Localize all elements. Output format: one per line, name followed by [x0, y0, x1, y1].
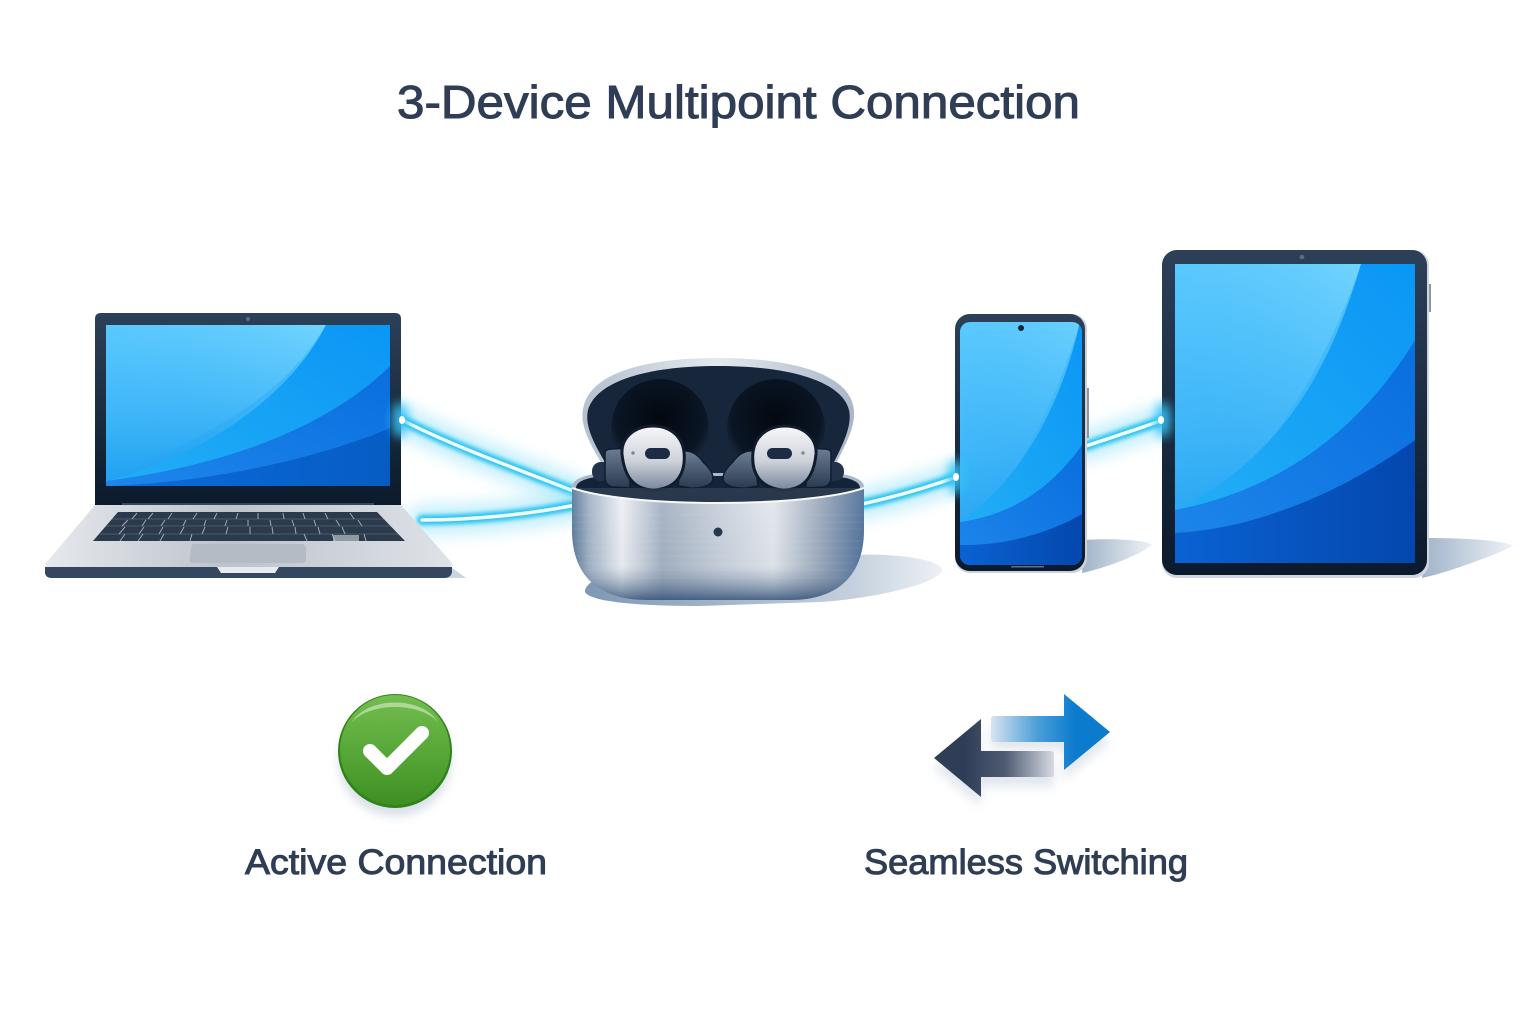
laptop — [45, 313, 466, 578]
laptop shadow — [440, 565, 466, 578]
laptop hinge — [122, 503, 374, 506]
charging case with earbuds — [572, 358, 942, 606]
laptop lid — [95, 313, 401, 505]
device glow points — [392, 402, 1171, 495]
case body — [572, 488, 864, 600]
phone screen — [960, 322, 1082, 565]
tablet camera — [1300, 255, 1304, 259]
phone bezel — [955, 314, 1085, 571]
laptop keyboard — [93, 512, 405, 541]
case lid — [582, 358, 854, 480]
right earbud — [723, 426, 844, 490]
icon: switching arrows — [934, 694, 1110, 807]
case shadow — [585, 555, 942, 606]
title: 3-Device Multipoint Connection — [397, 76, 1080, 128]
right arrow — [991, 694, 1110, 770]
case indicator light — [714, 528, 722, 536]
icon: green check — [338, 694, 452, 816]
case rim — [572, 473, 864, 510]
label: active connection: Active Connection — [245, 843, 547, 882]
case interior — [576, 476, 860, 503]
label: seamless switching: Seamless Switching — [864, 843, 1188, 882]
laptop base edge — [45, 567, 452, 578]
tablet screen — [1175, 264, 1415, 563]
laptop screen — [106, 325, 390, 486]
phone body — [955, 314, 1087, 573]
right earbud cup — [727, 379, 825, 477]
phone side buttons — [1086, 388, 1089, 438]
tablet shadow — [1422, 538, 1513, 578]
left earbud cup — [611, 379, 709, 477]
left arrow — [934, 719, 1054, 797]
phone home indicator — [1011, 566, 1044, 568]
smartphone — [955, 314, 1152, 573]
tablet bezel — [1162, 250, 1427, 575]
infographic canvas — [45, 84, 1512, 882]
connection beams — [402, 420, 1163, 520]
phone camera — [1018, 325, 1024, 331]
left earbud — [592, 426, 713, 490]
tablet body — [1162, 250, 1429, 578]
lid interior — [587, 366, 850, 480]
laptop notch — [217, 567, 279, 573]
laptop deck — [45, 505, 452, 567]
phone shadow — [1082, 539, 1152, 573]
tablet side button — [1428, 284, 1431, 312]
laptop webcam — [246, 317, 250, 321]
tablet — [1162, 250, 1513, 578]
laptop trackpad — [190, 544, 306, 563]
